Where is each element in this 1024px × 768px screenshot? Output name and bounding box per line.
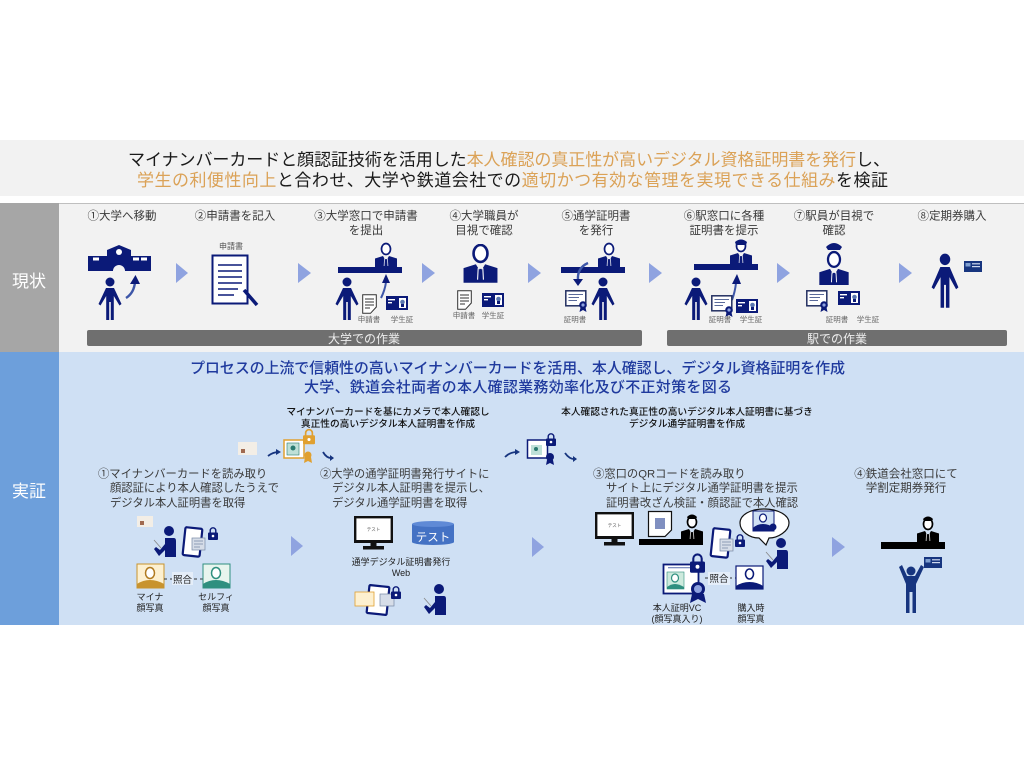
bar: station work [667,330,1007,346]
icon: issue commuting certificate: 証明書 [564,314,587,324]
section label: current: 現状 [12,272,46,291]
icon: present at station window [684,240,763,324]
step 5 heading: ⑤通学証明書 [562,208,630,222]
step 4 heading: ④大学職員が [450,208,519,222]
callout: commuting certificate: デジタル通学証明書を作成 [629,417,745,430]
blue heading: プロセスの上流で信頼性の高いマイナンバーカードを活用、本人確認し、デジタル資格証明を作成 [190,359,845,377]
photo: selfie face [203,564,230,588]
callout: commuting certificate: 本人確認された真正性の高いデジタル本人証明書に基づき [561,405,813,418]
step 6 heading: ⑥駅窓口に各種 [684,208,765,222]
photo: My Number face [137,564,164,588]
title band [0,140,1024,196]
icon group: step 4 issue pass [881,516,945,613]
icon: university staff checks: 学生証 [482,310,505,320]
icon group: step 2 web [352,517,454,615]
icon group: step 3 verification: (顔写真入り) [652,613,702,624]
icon: person with raised arms [899,565,924,613]
step 3 text: 証明書改ざん検証・顔認証で本人確認 [606,496,798,510]
arrow 3 [422,263,435,283]
arrow: step 2 to 3 [532,537,544,557]
icon: certificate to commuting certificate [505,434,577,465]
arrow 6 [777,263,790,283]
bar: university work: 大学での作業 [328,331,400,346]
arrow 2 [298,263,311,283]
step 4 text: 学割定期券発行 [866,480,946,494]
callout: identity certificate: 真正性の高いデジタル本人証明書を作成 [301,417,475,430]
icon: present at station window: 証明書 [709,314,732,324]
icon group: step 3 verification: 本人証明VC [653,602,702,613]
icon group: step 1 face match: セルフィ [198,592,234,602]
step 7 heading: 確認 [822,223,846,237]
icon: university staff checks [453,245,505,320]
icon group: step 3 verification: 購入時 [737,602,765,613]
bar: university work [87,330,642,346]
icon: database: テスト [416,532,450,544]
step 6 heading: 証明書を提示 [690,223,758,237]
icon: application form: 申請書 [219,241,243,251]
icon: application form [212,241,257,305]
arrow 5 [649,263,662,283]
arrow 7 [899,263,912,283]
label: match: 照合 [709,573,729,585]
step 8 heading: ⑧定期券購入 [918,208,987,222]
icon: station staff checks [807,243,880,324]
step 2 heading: ②申請書を記入 [195,208,276,222]
step 5 heading: を発行 [579,223,613,237]
icon: buys commuter pass [932,254,982,308]
blue heading: 大学、鉄道会社両者の本人確認業務効率化及び不正対策を図る [304,379,732,396]
icon group: step 2 web: Web [392,568,410,578]
icon: submit at university window: 学生証 [391,314,414,324]
arrow 4 [528,263,541,283]
step 4 text: ④鉄道会社窓口にて [854,466,958,480]
icon group: step 1 face match: 顔写真 [136,602,164,613]
panel: current process [0,203,1024,352]
icon: present at station window: 学生証 [740,314,763,324]
step 4 heading: 目視で確認 [455,223,513,237]
callout: identity certificate: マイナンバーカードを基にカメラで本人確認し [286,405,490,418]
step 1 heading: ①大学へ移動 [88,208,156,222]
title band: マイナンバーカードと顔認証技術を活用した本人確認の真正性が高いデジタル資格証明書を発行し、 [128,150,890,170]
icon: identity VC [664,554,706,603]
arrow 1 [176,263,188,283]
icon group: step 1 face match: 顔写真 [202,602,230,613]
icon: QR document [648,512,672,536]
icon: university staff checks: 申請書 [453,310,476,320]
panel: demonstration [0,352,1024,625]
label: match: 照合 [173,574,192,586]
step 2 text: デジタル通学証明書を取得 [332,496,467,510]
arrow: step 1 to 2 [291,536,303,556]
icon: submit at university window: 申請書 [358,314,381,324]
icon group: step 2 web: 通学デジタル証明書発行 [352,556,450,567]
speech bubble [740,509,789,545]
step 1 text: デジタル本人証明書を取得 [110,496,245,510]
title band: 学生の利便性向上と合わせ、大学や鉄道会社での適切かつ有効な管理を実現できる仕組みを検証 [137,171,888,190]
arrow: step 3 to 4 [832,537,845,557]
step 1 text: ①マイナンバーカードを読み取り [98,466,267,480]
step 2 text: ②大学の通学証明書発行サイトに [320,466,489,480]
step 3 text: ③窓口のQRコードを読み取り [593,466,746,480]
icon group: step 1 face match [136,516,234,613]
label: match [705,572,736,585]
icon: university and student [88,245,151,320]
step 3 text: サイト上にデジタル通学証明書を提示 [606,480,798,494]
step 7 heading: ⑦駅員が目視で [794,208,874,222]
section label: demonstration: 実証 [12,482,46,501]
icon: station staff checks: 学生証 [857,314,880,324]
photo: purchase-time face [736,566,763,589]
icon: staff with counter [639,514,703,545]
icon: submit at university window [336,244,414,324]
bar: station work: 駅での作業 [807,332,867,346]
icon: station staff checks: 証明書 [826,314,849,324]
icon: issue commuting certificate [561,244,625,324]
step 1 text: 顔認証により本人確認したうえで [110,480,279,494]
icon group: step 3 verification: 顔写真 [737,613,765,624]
icon group: step 3 verification [595,509,789,624]
step 3 heading: を提出 [349,223,383,237]
step 2 text: デジタル本人証明書を提示し、 [332,480,490,494]
step 3 heading: ③大学窓口で申請書 [314,208,418,222]
icon group: step 1 face match: マイナ [137,592,163,602]
icon: my number card to certificate [238,430,334,463]
